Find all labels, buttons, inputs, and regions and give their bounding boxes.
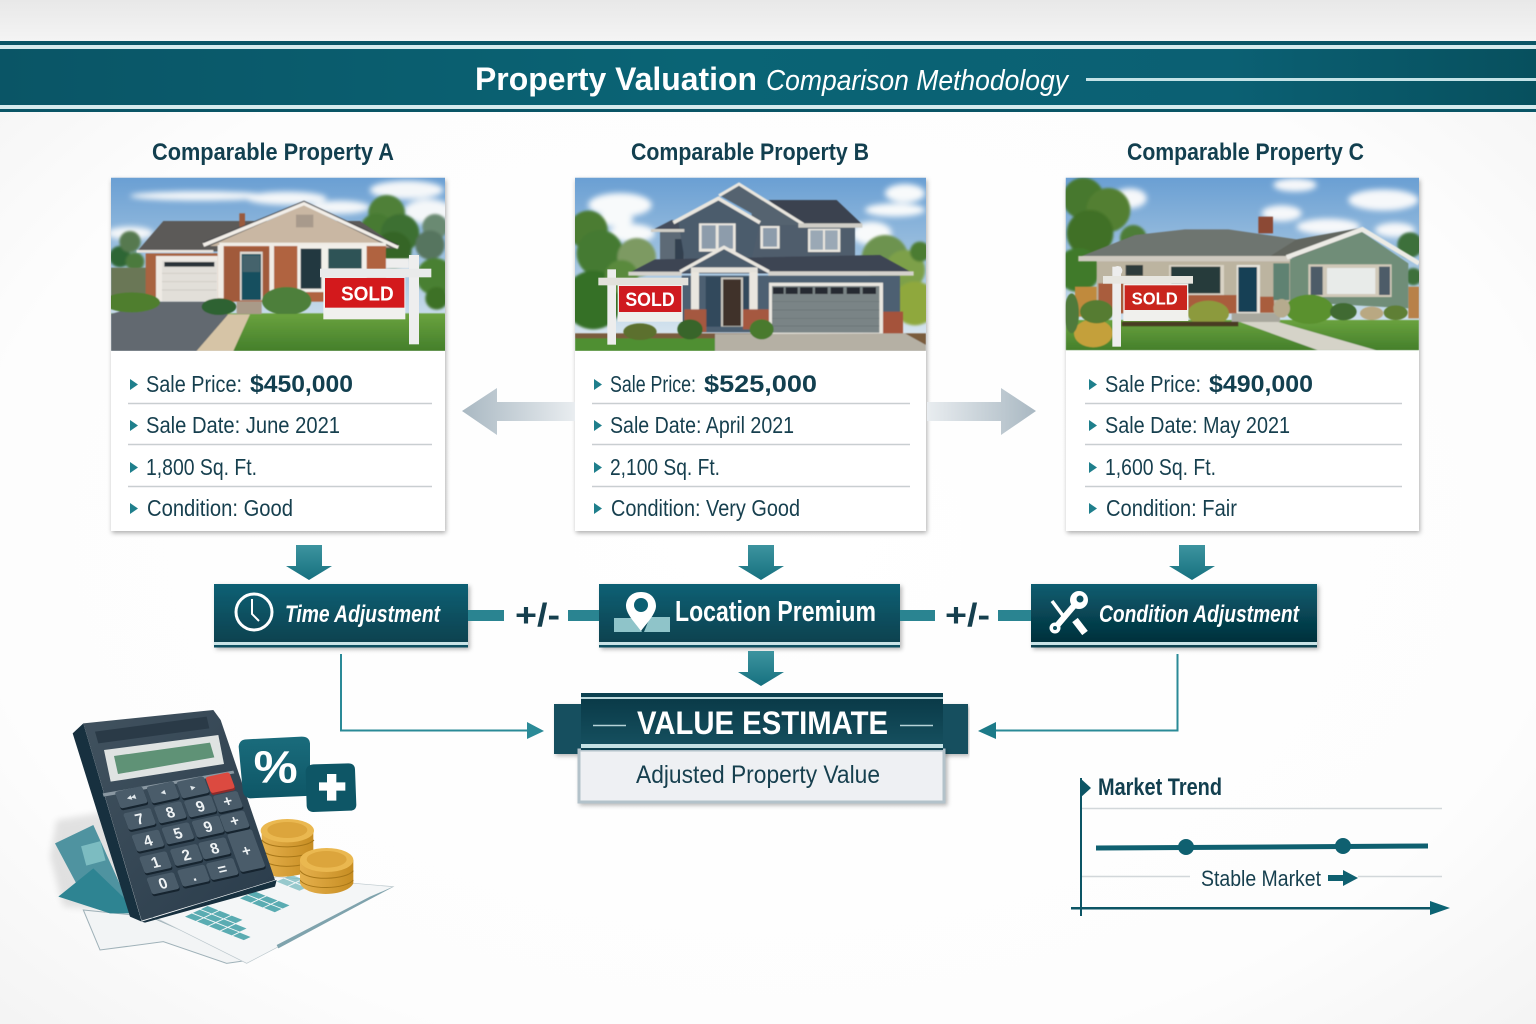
spec list B: 2,100 Sq. Ft.	[610, 454, 720, 480]
plus minus symbol: +/-	[515, 597, 560, 633]
coin stack front	[300, 848, 353, 894]
icon: tools	[1050, 591, 1088, 634]
spec list B: Sale Date: April 2021	[610, 412, 794, 438]
adjusted property value label: Adjusted Property Value	[636, 761, 880, 789]
photo: house B with sold sign	[564, 178, 937, 351]
arrow: stable trend	[1328, 870, 1358, 886]
arrow: location premium down to value estimate	[738, 651, 784, 686]
icon: clock	[236, 594, 272, 630]
arrow: B to C	[927, 388, 1036, 435]
box: condition adjustment: Condition Adjustment	[1099, 601, 1300, 628]
title banner: Comparison Methodology	[766, 65, 1069, 97]
illustration: calculator, papers and coins	[50, 710, 393, 963]
spec list C	[1085, 371, 1402, 521]
percent badge: %	[254, 742, 298, 793]
spec list B: Sale Price:	[610, 371, 696, 397]
spec list B	[592, 371, 910, 521]
photo: house B with sold sign: SOLD	[625, 290, 675, 311]
calculator keys: 9	[201, 818, 215, 836]
spec list B: $525,000	[704, 371, 817, 398]
calculator keys: .	[189, 868, 199, 885]
calculator keys: 2	[179, 847, 194, 865]
calculator keys: 5	[171, 825, 186, 843]
spec list A: Sale Date: June 2021	[146, 412, 340, 438]
spec list C: Sale Date: May 2021	[1105, 412, 1290, 438]
flow line: time adjustment to value estimate	[341, 654, 544, 739]
arrow: B down to location premium	[738, 545, 784, 580]
calculator keys: 4	[141, 832, 156, 850]
chart title: Market Trend	[1098, 774, 1222, 801]
photo: house A with sold sign: SOLD	[341, 283, 394, 306]
photo: house C with sold sign	[1056, 178, 1423, 350]
spec list A: Sale Price:	[146, 371, 242, 397]
box: condition adjustment	[1031, 584, 1317, 648]
heading C: Comparable Property C	[1127, 139, 1364, 166]
value estimate heading: VALUE ESTIMATE	[637, 705, 888, 741]
box: time adjustment: Time Adjustment	[285, 601, 441, 628]
stable market label: Stable Market	[1201, 866, 1321, 891]
box: location premium	[599, 584, 900, 648]
photo: house A with sold sign	[103, 178, 454, 351]
plus minus symbol: +/-	[945, 597, 990, 633]
spec list A: 1,800 Sq. Ft.	[146, 454, 257, 480]
flow line: condition adjustment to value estimate	[978, 654, 1178, 739]
calculator keys: +	[227, 812, 242, 830]
calculator keys: +	[221, 793, 235, 811]
calculator keys: 8	[163, 804, 178, 822]
spec list A	[128, 371, 432, 521]
arrow: B to A	[462, 388, 575, 435]
calculator keys: 7	[133, 811, 147, 829]
plus badge	[306, 763, 356, 812]
panel: comparable property C	[1056, 139, 1423, 531]
chart: market trend	[1071, 774, 1450, 916]
icon: map pin	[614, 592, 670, 632]
arrow: C down to condition adjustment	[1169, 545, 1215, 580]
photo: house C with sold sign: SOLD	[1132, 289, 1178, 309]
spec list C: Sale Price:	[1105, 371, 1201, 397]
connector: location to condition	[900, 597, 1031, 633]
spec list A: Condition: Good	[147, 495, 293, 521]
calculator keys: =	[215, 861, 230, 879]
arrow: A down to time adjustment	[286, 545, 332, 580]
spec list C: 1,600 Sq. Ft.	[1105, 454, 1216, 480]
heading A: Comparable Property A	[152, 139, 394, 166]
spec list C: $490,000	[1209, 371, 1313, 398]
panel: comparable property B	[564, 139, 937, 531]
panel: value estimate	[554, 693, 968, 802]
calculator keys: ▸	[188, 781, 197, 792]
calculator keys: 0	[156, 875, 170, 893]
spec list C: Condition: Fair	[1106, 495, 1237, 521]
title banner	[0, 41, 1536, 112]
calculator keys: 1	[149, 854, 163, 872]
spec list A: $450,000	[250, 371, 353, 398]
coin stack back	[261, 819, 314, 877]
panel: comparable property A	[103, 139, 454, 531]
connector: time to location	[468, 597, 599, 633]
calculator keys: ◂◂	[124, 791, 138, 803]
box: location premium: Location Premium	[675, 596, 876, 628]
calculator keys: +	[239, 842, 254, 860]
calculator body	[73, 710, 277, 923]
papers	[50, 810, 393, 963]
spec list B: Condition: Very Good	[611, 495, 800, 521]
box: time adjustment	[214, 584, 468, 648]
title text: Property Valuation	[475, 61, 757, 97]
percent badge	[239, 737, 310, 798]
calculator keys: 9	[193, 798, 208, 816]
calculator keys: ◂	[158, 786, 167, 797]
heading B: Comparable Property B	[631, 139, 869, 166]
calculator keys	[115, 772, 266, 897]
calculator keys: 8	[208, 840, 222, 858]
